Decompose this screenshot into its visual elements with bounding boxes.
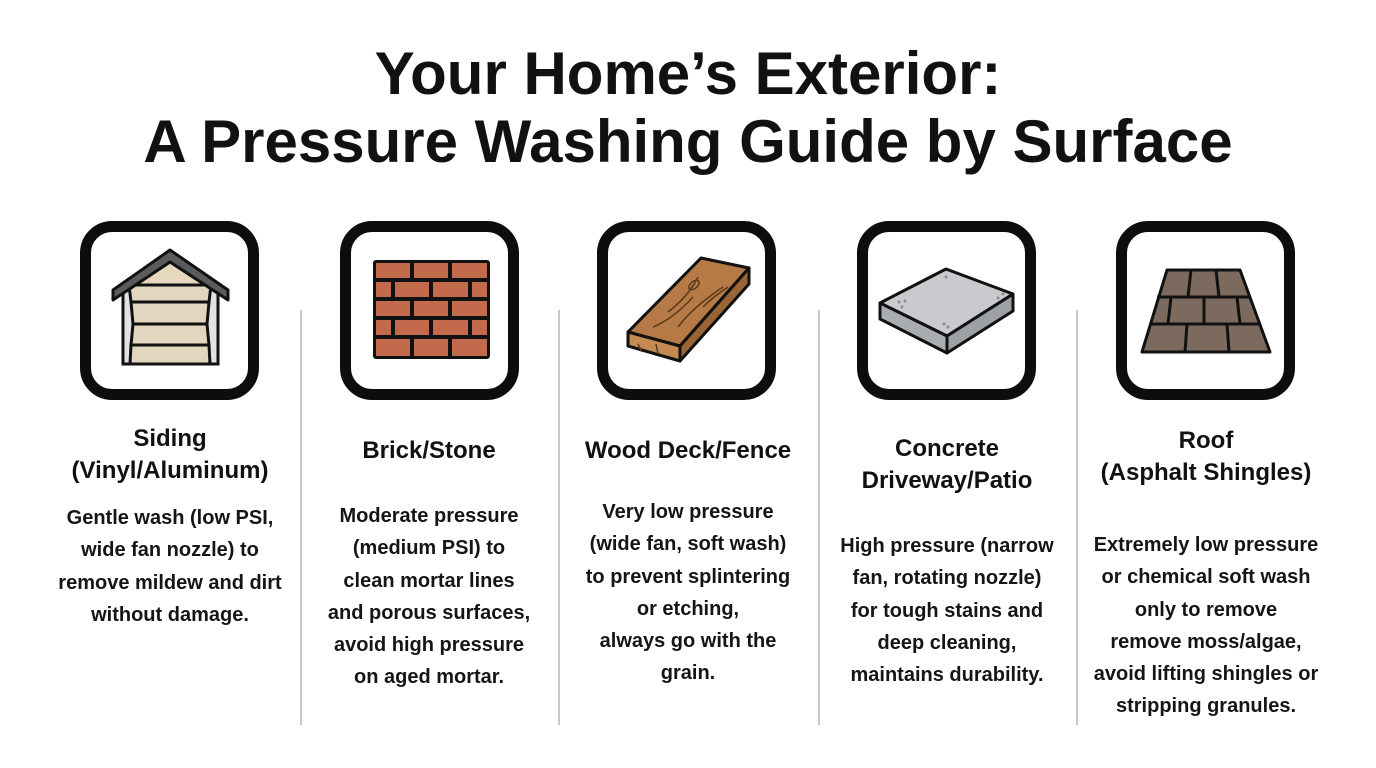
heading: siding: (Vinyl/Aluminum)	[72, 457, 268, 484]
text: siding: remove mildew and dirt	[58, 572, 282, 594]
text: brick	[328, 505, 530, 688]
text: roof: only to remove	[1135, 599, 1277, 621]
heading: siding: Siding	[133, 425, 207, 452]
heading: roof: Roof	[1179, 427, 1233, 454]
heading: concrete: Concrete	[895, 435, 999, 462]
text: concrete	[840, 535, 1054, 686]
text: concrete: for tough stains and	[851, 600, 1043, 622]
panel: concrete	[840, 221, 1054, 686]
text: wood: always go with the	[600, 630, 776, 652]
icon: wood plank	[597, 221, 776, 400]
text: roof: or chemical soft wash	[1102, 566, 1310, 588]
text: brick: Moderate pressure	[340, 505, 518, 527]
title: A Pressure Washing Guide by Surface	[143, 108, 1233, 175]
text: wood: or etching,	[637, 598, 739, 620]
heading: roof	[1101, 427, 1311, 486]
text: brick: (medium PSI) to	[353, 537, 505, 559]
text: wood: Very low pressure	[602, 501, 774, 523]
text: wood	[586, 501, 790, 684]
heading: concrete: Driveway/Patio	[862, 467, 1032, 494]
text: brick: clean mortar lines	[343, 570, 515, 592]
title: Your Home’s Exterior:	[375, 40, 1001, 107]
text: siding: Gentle wash (low PSI,	[67, 507, 273, 529]
heading: wood: Wood Deck/Fence	[585, 437, 791, 464]
heading: roof: (Asphalt Shingles)	[1101, 459, 1311, 486]
icon: siding house	[80, 221, 259, 400]
text: concrete: deep cleaning,	[878, 632, 1016, 654]
text: roof: Extremely low pressure	[1094, 534, 1318, 556]
panel: roof	[1094, 221, 1318, 717]
text: siding: wide fan nozzle) to	[81, 539, 259, 561]
text: roof	[1094, 534, 1318, 717]
text: roof: remove moss/algae,	[1110, 631, 1302, 653]
text: wood: to prevent splintering	[586, 566, 790, 588]
text: roof: stripping granules.	[1116, 695, 1296, 717]
text: concrete: fan, rotating nozzle)	[853, 567, 1041, 589]
heading: brick: Brick/Stone	[362, 437, 496, 464]
text: siding	[58, 507, 282, 626]
text: wood: (wide fan, soft wash)	[590, 533, 786, 555]
icon: brick wall	[340, 221, 519, 400]
text: concrete: High pressure (narrow	[840, 535, 1054, 557]
icon: concrete slab	[857, 221, 1036, 400]
panel: brick	[328, 221, 530, 688]
heading: concrete	[862, 435, 1032, 494]
text: brick: avoid high pressure	[334, 634, 524, 656]
text: concrete: maintains durability.	[850, 664, 1044, 686]
text: wood: grain.	[661, 662, 715, 684]
text: siding: without damage.	[91, 604, 249, 626]
title	[143, 40, 1233, 175]
text: brick: and porous surfaces,	[328, 602, 530, 624]
panel: siding	[58, 221, 282, 626]
text: roof: avoid lifting shingles or	[1094, 663, 1318, 685]
panel: wood	[584, 221, 791, 684]
heading: siding	[72, 425, 268, 484]
text: brick: on aged mortar.	[354, 666, 504, 688]
icon: roof shingles	[1116, 221, 1295, 400]
